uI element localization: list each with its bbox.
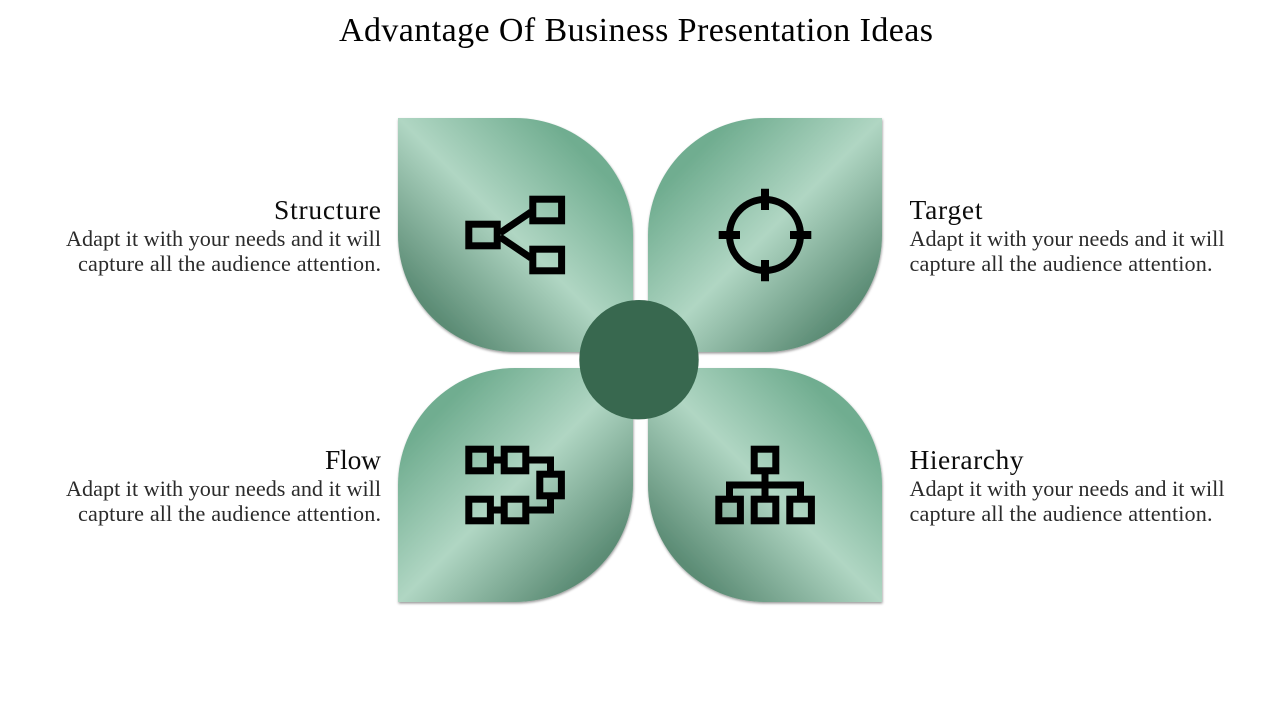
text block: flow: Flow [325,444,381,475]
text block: hierarchy: Hierarchy [910,444,1024,475]
panel: target leaf [648,118,882,352]
icon: hierarchy chart [719,449,811,521]
text block: target [910,194,1224,276]
text block: hierarchy: Adapt it with your needs and it will [910,476,1224,501]
title: Advantage Of Business Presentation Ideas [339,12,933,49]
text block: flow: capture all the audience attention. [78,501,381,526]
panel: flow leaf [398,368,633,602]
panel: hierarchy leaf [648,368,882,602]
text block: flow [66,444,381,526]
icon: structure network [469,199,562,271]
icon: target crosshair [719,189,811,281]
panel: structure leaf [398,118,633,352]
text block: structure: Adapt it with your needs and it will [66,226,381,251]
text block: hierarchy: capture all the audience attention. [910,501,1212,526]
icon: flow diagram [469,449,561,521]
text block: target: Adapt it with your needs and it will [910,226,1224,251]
text block: target: Target [910,194,983,225]
text block: flow: Adapt it with your needs and it will [66,476,381,501]
text block: structure: Structure [274,194,381,225]
text block: structure: capture all the audience attention. [78,251,381,276]
center circle [579,300,699,419]
text block: structure [66,194,381,276]
text block: target: capture all the audience attention. [910,251,1212,276]
text block: hierarchy [910,444,1224,526]
